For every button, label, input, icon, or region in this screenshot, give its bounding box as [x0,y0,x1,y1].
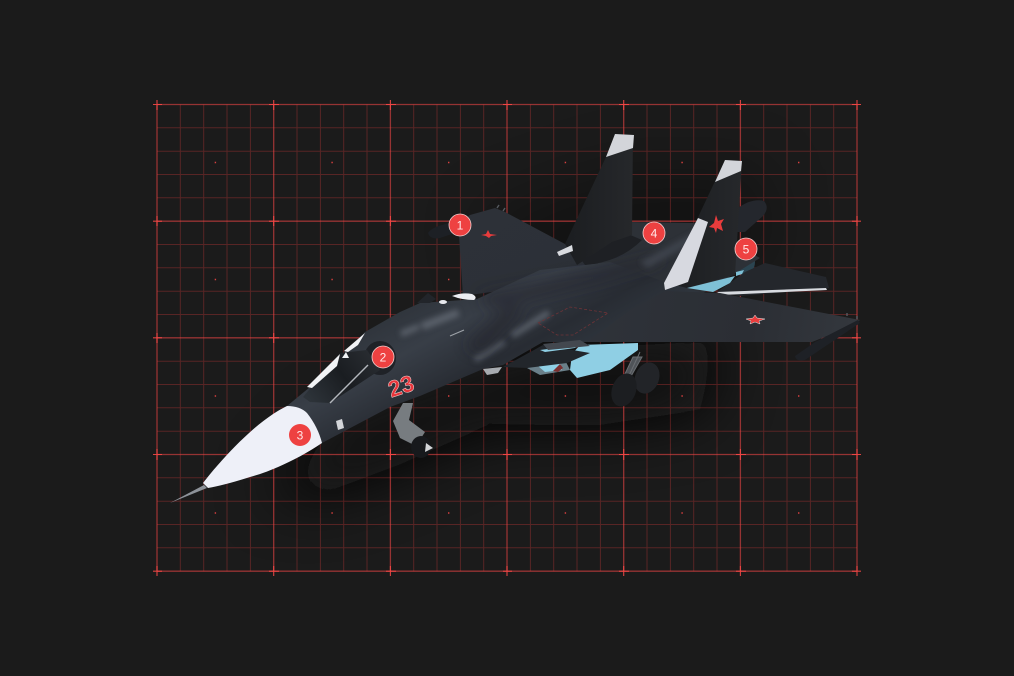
cockpit rear ring [364,341,396,375]
blue sliver by stabilizer [736,270,744,276]
measurement grid [153,100,861,576]
far vertical fin [565,134,633,265]
gray wing root band [543,340,590,350]
marker 3 [289,424,311,446]
side number: 23 [385,370,417,402]
canopy white reflection lower [307,354,340,388]
ground shadow beneath aircraft [270,170,770,495]
near fin white stripe [664,218,708,290]
wheel [411,436,431,458]
near wing tip rails [847,313,857,319]
canopy white triangle [342,352,349,358]
main landing gear [607,352,664,410]
canopy frame [330,365,368,403]
strut [393,403,425,446]
small dorsal patch [439,300,447,304]
marker 3: 3 [297,428,304,442]
far wing tip rails [497,205,505,211]
tailplane edge highlight [717,288,827,295]
gray intake plate [483,367,502,375]
access panel [336,419,344,430]
marker 5 [735,238,757,260]
dorsal white patch [452,293,476,300]
far tailplane [717,263,829,296]
nose probe [170,485,207,503]
wheel rear [630,359,664,397]
intake red tag [553,364,563,372]
far wing tip pod [428,216,472,238]
canopy [303,350,380,403]
near vertical fin [667,160,742,288]
fuselage highlights [400,309,551,362]
body ridge shadow [465,255,665,355]
far wing star [481,230,497,238]
gear strut [624,352,642,380]
hub [425,443,433,452]
canopy white reflection upper [344,333,365,352]
near fin white tip [715,160,742,182]
radome [203,406,322,488]
far fin white tip [606,134,634,157]
near wing [587,291,860,342]
nose landing gear [393,403,433,458]
marker 2: 2 [380,350,387,364]
strake under wing [503,345,590,368]
near fin star [709,215,724,233]
marker 2 [372,346,394,368]
aircraft [170,134,860,503]
marker 5: 5 [743,242,750,256]
far fin base cap [557,245,573,256]
dashed red panel [538,307,608,335]
intake blue lip [538,362,562,372]
strake blue stripe [540,345,580,352]
intake fairing [527,360,570,375]
rear fuselage nacelle [570,222,760,310]
near fin base blue panel [687,276,735,292]
nacelle shadow [580,234,642,265]
underside blue panels [570,343,638,378]
near wing star [746,315,765,324]
top panel line [450,330,464,336]
marker 1: 1 [457,218,464,232]
tail cone [733,200,767,232]
rear ridge highlight [640,232,700,268]
wheel front [607,370,641,410]
marker 4 [643,222,665,244]
far wing [459,208,610,296]
near wing tip pod [795,320,860,360]
marker 1 [449,214,471,236]
marker 4: 4 [651,226,658,240]
engine nozzle [733,249,755,275]
fuselage and wing blend [287,262,700,443]
dorsal fairing [417,293,436,303]
